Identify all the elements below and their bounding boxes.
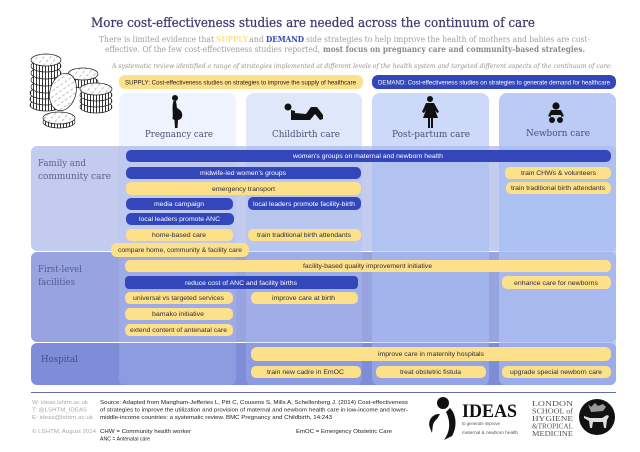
title: More cost-effectiveness studies are needed across the continuum of care bbox=[91, 16, 535, 31]
logo: LSHTM bbox=[532, 399, 615, 438]
source citation: middle-income countries: a systematic review. BMC Pregnancy and Childbirth, 14:243 bbox=[100, 415, 332, 421]
bar: extend content of antenatal care bbox=[125, 324, 233, 336]
bar: local leaders promote ANC bbox=[126, 213, 234, 225]
source citation: Source: Adapted from Mangham-Jefferies L, Pitt C, Cousens S, Mills A, Schellenberg J. (2014) Cost-effectiveness bbox=[100, 400, 408, 406]
illustration: coin stacks bbox=[30, 54, 112, 128]
logo: LSHTM: MEDICINE bbox=[532, 429, 573, 438]
supply banner: SUPPLY: Cost-effectiveness studies on strategies to improve the supply of healthcare bbox=[125, 80, 357, 86]
logo: IDEAS bbox=[429, 397, 518, 440]
logo: LSHTM: &TROPICAL bbox=[532, 422, 573, 430]
demand banner: DEMAND: Cost-effectiveness studies on strategies to generate demand for healthcare bbox=[378, 80, 611, 86]
bar: universal vs targeted services bbox=[125, 292, 233, 304]
bar: facility-based quality improvement bbox=[125, 260, 611, 272]
contact details: E: ideas@lshtm.ac.uk bbox=[32, 415, 93, 421]
panel: family and community care row bbox=[31, 146, 616, 251]
bar: improve care at birth: improve care at birth bbox=[272, 296, 335, 302]
bar: home-based care: home-based care bbox=[152, 233, 207, 239]
bar: women's groups: women's groups on maternal and newborn health bbox=[292, 154, 443, 160]
bar: enhance care for newborns: enhance care for newborns bbox=[514, 281, 598, 287]
icon: pregnant woman bbox=[172, 95, 182, 128]
bar: extend content of antenatal care: extend content of antenatal care bbox=[130, 328, 228, 334]
abbreviations: EmOC = Emergency Obstetric Care bbox=[296, 429, 392, 435]
bar: universal vs targeted services: universal vs targeted services bbox=[133, 296, 224, 302]
contact details: W: ideas.lshtm.ac.uk bbox=[32, 400, 88, 406]
supply banner bbox=[119, 75, 363, 89]
bar: train traditional birth attendants: train traditional birth attendants bbox=[257, 233, 351, 239]
bar: train CHWs and volunteers bbox=[505, 167, 611, 179]
logo: IDEAS: to generate improve bbox=[462, 421, 500, 426]
bar: compare home, community and facility care bbox=[111, 243, 249, 257]
bar: emergency transport bbox=[126, 182, 361, 195]
contact details bbox=[32, 400, 96, 435]
bar: enhance care for newborns bbox=[502, 276, 611, 289]
heading: pregnancy care: Pregnancy care bbox=[145, 129, 213, 140]
source citation bbox=[100, 400, 408, 421]
row label: first-level: First-level bbox=[38, 264, 82, 275]
bar: midwife-led women's groups: midwife-led women's groups bbox=[200, 171, 286, 177]
intro text: effective. Of the few cost-effectiveness studies reported, bbox=[105, 45, 320, 54]
bar: midwife-led women's groups bbox=[126, 167, 361, 179]
abbreviations: CHW = Community health worker bbox=[100, 429, 191, 435]
bar: facility-based quality improvement: facility-based quality improvement initiative bbox=[303, 264, 433, 270]
logo: LSHTM: LONDON bbox=[532, 399, 574, 408]
bar: reduce cost bbox=[125, 276, 358, 289]
bar: local leaders promote ANC: local leaders promote ANC bbox=[139, 217, 221, 223]
panel: hospital row bbox=[31, 343, 616, 385]
bar: train traditional birth attendants newborn bbox=[506, 182, 611, 194]
icon: childbirth figure bbox=[284, 104, 323, 120]
bar: improve care in maternity hospitals: improve care in maternity hospitals bbox=[378, 352, 484, 358]
logo: IDEAS: IDEAS bbox=[462, 401, 517, 422]
intro text: DEMAND bbox=[266, 34, 304, 44]
row label: hospital: Hospital bbox=[41, 354, 78, 365]
bar: improve care at birth bbox=[251, 292, 358, 304]
intro text: most focus on pregnancy care and community-based strategies. bbox=[323, 44, 585, 54]
intro text: SUPPLY bbox=[216, 34, 248, 44]
bar: media campaign bbox=[126, 198, 233, 210]
bar: local leaders promote facility-birth: local leaders promote facility-birth bbox=[253, 202, 355, 208]
bar: train traditional birth attendants newborn: train traditional birth attendants bbox=[511, 186, 605, 192]
icon: woman bbox=[422, 96, 439, 128]
intro text: There is limited evidence that bbox=[99, 35, 215, 44]
bar: treat obstetric fistula bbox=[376, 366, 486, 378]
bar: reduce cost: reduce cost of ANC and facility births bbox=[185, 281, 297, 287]
bar: emergency transport: emergency transport bbox=[212, 187, 275, 193]
review statement: A systematic review identified a range of strategies implemented at different levels of the health system and targeted different aspects of the continuum of care: bbox=[111, 62, 612, 70]
heading: childbirth care: Childbirth care bbox=[272, 129, 340, 140]
abbreviations: ANC = Antenatal care bbox=[100, 436, 150, 442]
demand banner bbox=[372, 75, 616, 89]
panel: first-level facilities row bbox=[31, 252, 616, 342]
bar: women's groups bbox=[126, 150, 611, 162]
contact details: © LSHTM, August 2014 bbox=[32, 428, 96, 435]
contact details: T: @LSHTM_IDEAS bbox=[32, 408, 87, 414]
heading: post-partum care: Post-partum care bbox=[392, 129, 470, 140]
bar: media campaign: media campaign bbox=[154, 202, 204, 208]
bar: compare home, community and facility care: compare home, community & facility care bbox=[118, 248, 243, 254]
bar: local leaders promote facility-birth bbox=[248, 197, 361, 210]
row label: facilities: facilities bbox=[38, 277, 75, 288]
bar: upgrade special newborn care: upgrade special newborn care bbox=[510, 370, 603, 376]
logo: LSHTM: SCHOOL of bbox=[532, 406, 574, 416]
bar: bamako initiative: bamako initiative bbox=[152, 312, 205, 318]
bar: home-based care bbox=[126, 229, 233, 241]
row label: community care: community care bbox=[38, 171, 111, 182]
panel: column headers bbox=[119, 93, 616, 385]
bar: train new cadre in EmOC bbox=[251, 366, 361, 378]
bar: bamako initiative bbox=[125, 308, 233, 320]
bar: treat obstetric fistula: treat obstetric fistula bbox=[400, 370, 462, 376]
bar: train CHWs and volunteers: train CHWs & volunteers bbox=[521, 171, 596, 177]
heading: newborn care: Newborn care bbox=[526, 128, 590, 139]
intro text: side strategies to help improve the health of mothers and babies are cost- bbox=[306, 35, 590, 44]
intro text bbox=[99, 34, 590, 54]
icon: baby bbox=[548, 102, 564, 123]
bar: upgrade special newborn care bbox=[502, 366, 611, 378]
row label: family and community care: Family and bbox=[38, 158, 86, 169]
bar: train traditional birth attendants bbox=[248, 229, 361, 241]
logo: LSHTM: HYGIENE bbox=[532, 414, 574, 423]
logo: IDEAS: maternal & newborn health bbox=[462, 430, 518, 435]
bar: improve care in maternity hospitals bbox=[251, 347, 611, 361]
source citation: of strategies to improve the utilization and provision of maternal and newborn health care in low-income and lower- bbox=[100, 408, 408, 414]
abbreviations bbox=[100, 429, 392, 442]
bar: train new cadre in EmOC: train new cadre in EmOC bbox=[267, 370, 345, 376]
intro text: and bbox=[249, 35, 264, 44]
